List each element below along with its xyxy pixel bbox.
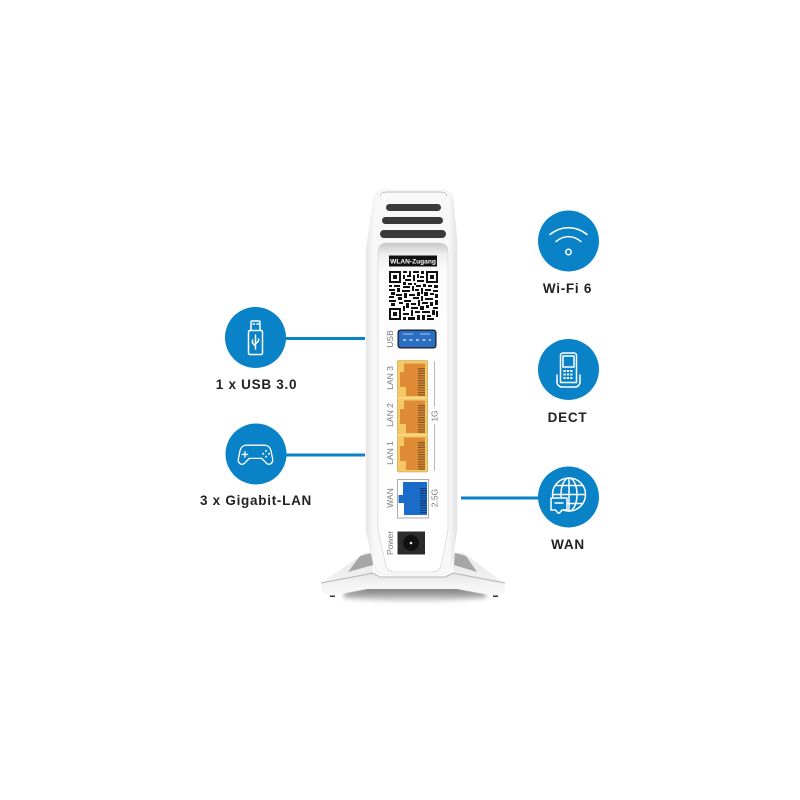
- feature: Gigabit-LAN: [200, 424, 312, 508]
- icon: globe with network port: [538, 466, 599, 528]
- connector line: Gigabit-LAN: [285, 454, 365, 456]
- label: USB: 1 x USB 3.0: [216, 377, 297, 392]
- LAN ports: LAN 3: [385, 366, 395, 390]
- connector line: USB: [285, 337, 365, 340]
- feature: DECT: [538, 339, 599, 425]
- power socket: [385, 531, 425, 555]
- LAN ports: [385, 360, 440, 472]
- USB port: [385, 330, 436, 348]
- router device: [321, 190, 505, 602]
- ventilation slots: [380, 204, 446, 238]
- WLAN label: [389, 256, 437, 266]
- WAN port: WAN: [385, 488, 395, 508]
- icon: cordless phone: [538, 339, 599, 400]
- label: DECT: DECT: [548, 410, 587, 425]
- feature: WAN: [538, 466, 599, 552]
- icon: USB stick: [225, 307, 286, 368]
- 1G bracket: 1G: [430, 410, 440, 422]
- stand: [321, 553, 505, 597]
- label: WAN: WAN: [551, 537, 585, 552]
- LAN ports: LAN 2: [385, 403, 395, 427]
- icon: wifi: [538, 210, 599, 272]
- WAN port: 2.5G: [430, 489, 440, 507]
- QR code: [389, 271, 438, 320]
- inner panel: [378, 243, 448, 572]
- icon: gamepad: [226, 424, 286, 484]
- WLAN label: WLAN-Zugang: [390, 258, 436, 266]
- LAN ports: LAN 1: [385, 441, 395, 465]
- stand shadow: [343, 586, 487, 602]
- USB port: USB: [385, 330, 395, 348]
- connector line: WAN: [461, 496, 541, 500]
- label: Wi-Fi 6: Wi-Fi 6: [543, 281, 592, 296]
- label: 3 x Gigabit-LAN: 3 x Gigabit-LAN: [200, 493, 312, 508]
- feature: Wi-Fi 6: [538, 210, 599, 296]
- router body: [366, 190, 457, 575]
- power socket: Power: [385, 531, 395, 555]
- WAN port: [385, 480, 440, 518]
- feature: USB: [216, 307, 297, 392]
